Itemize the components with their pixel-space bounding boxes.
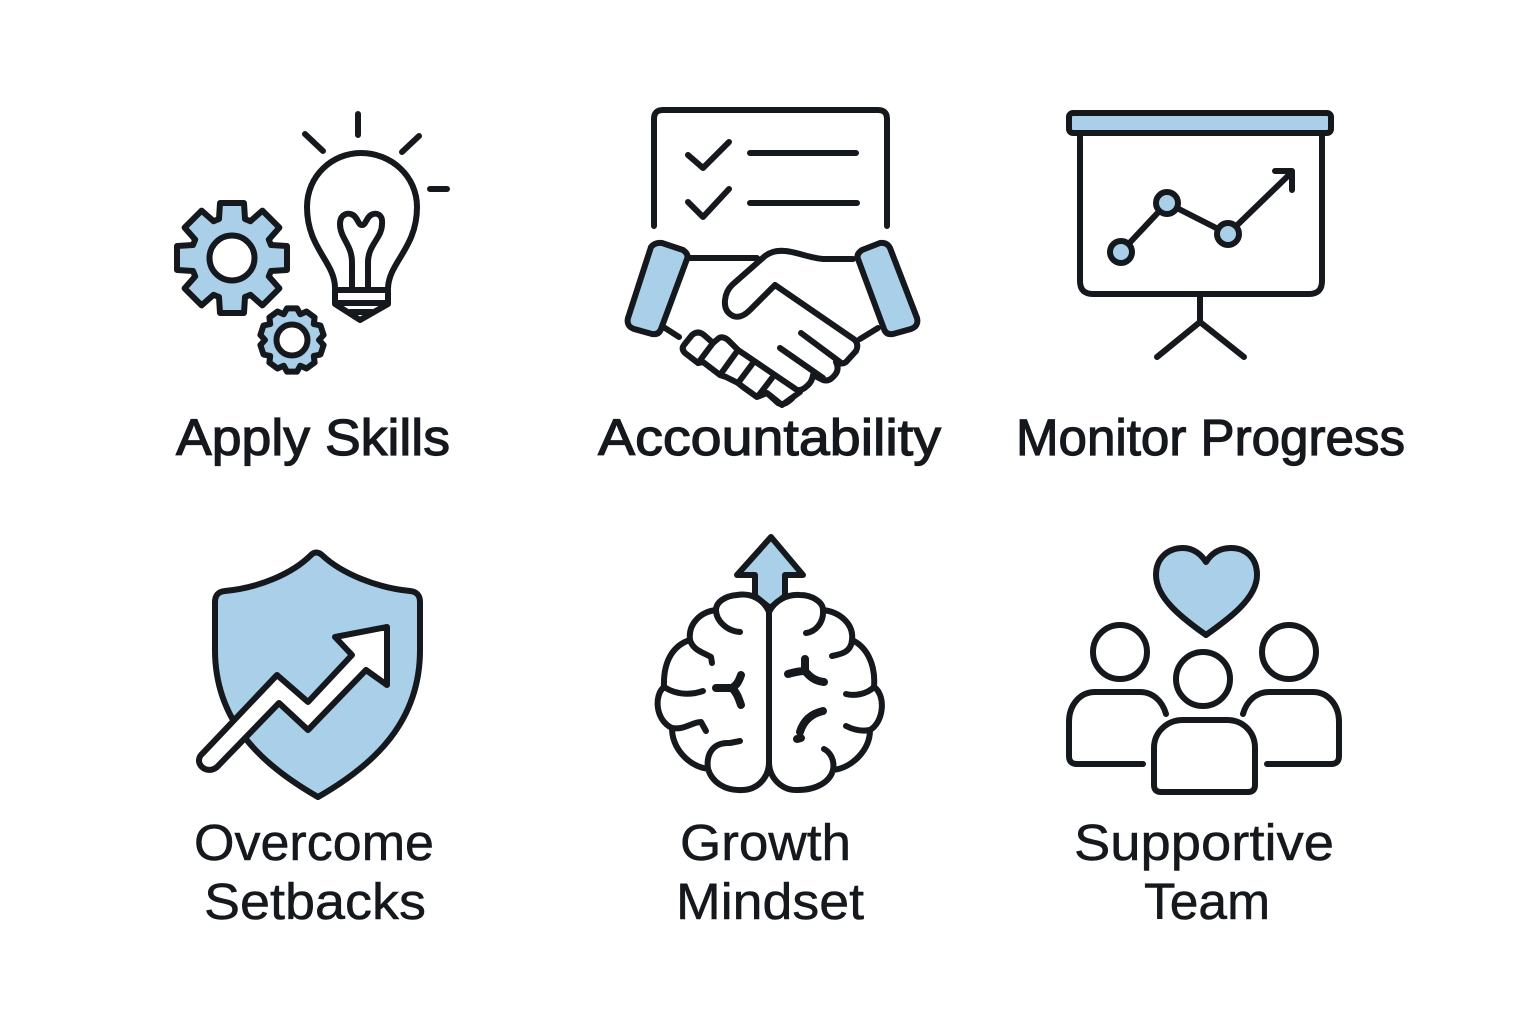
icon: large gear [177,203,287,313]
label: Monitor Progress: Monitor Progress [1016,409,1405,466]
icon: small gear [260,308,324,372]
icon: right cuff [858,243,917,334]
icon: team of three people [1069,625,1339,792]
label: Growth Mindset: Growth [680,814,851,871]
panel: monitor progress [1069,113,1331,357]
label: Supportive Team: Supportive [1074,814,1334,871]
label: Overcome Setbacks: Setbacks [204,873,426,930]
icon: heart [1156,548,1257,635]
icon: shield [215,552,420,797]
chart: rising line with points [1110,171,1292,263]
label: Growth Mindset [676,814,864,930]
icon: interlocked fingers [683,332,800,405]
icon: handshake [628,243,917,405]
panel: apply skills [177,114,447,372]
icon: projector screen [1069,113,1331,357]
label: Supportive Team: Team [1144,873,1270,930]
icon: checklist board [654,110,887,226]
icon: light bulb [305,114,447,320]
icon: up arrow [737,537,803,608]
label: Growth Mindset: Mindset [676,873,864,930]
panel: accountability [628,110,917,405]
label: Overcome Setbacks: Overcome [194,814,434,871]
icon: rising arrow [199,627,387,770]
panel: overcome setbacks [199,552,420,797]
label: Accountability: Accountability [598,409,942,466]
label: Apply Skills: Apply Skills [176,409,450,466]
icon: left cuff [628,243,688,334]
icon: brain [658,595,882,790]
label: Supportive Team [1074,814,1334,930]
panel: growth mindset [658,537,882,790]
label: Overcome Setbacks [194,814,434,930]
panel: supportive team [1069,548,1339,792]
